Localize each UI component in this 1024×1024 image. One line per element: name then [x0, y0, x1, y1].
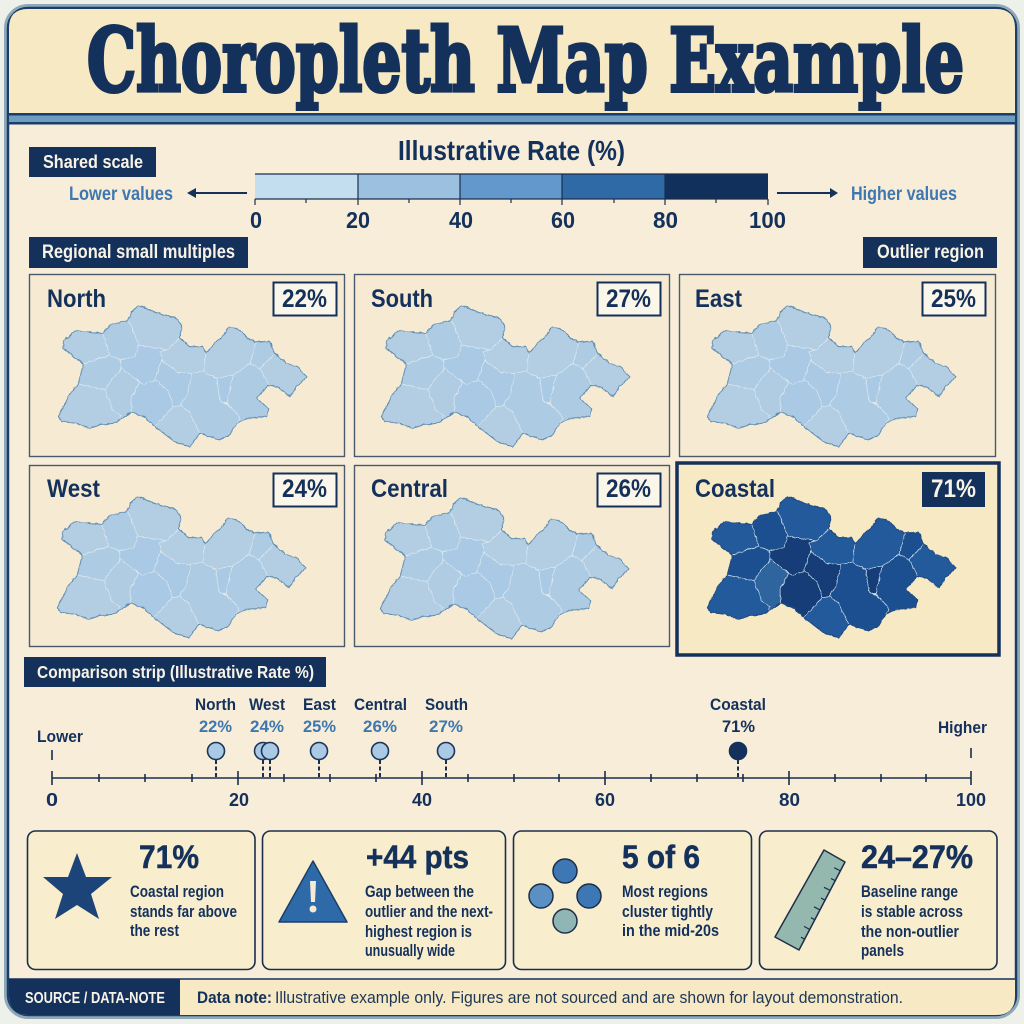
card: 24–27%: is stable across [861, 903, 963, 921]
panel: East [680, 274, 996, 456]
badge: regional small multiples [29, 237, 248, 268]
panel: South [354, 274, 670, 456]
legend ticks: 80 [653, 207, 678, 233]
marker: Central [354, 695, 407, 778]
card: 24–27%: the non-outlier [861, 923, 959, 941]
marker: Coastal: Coastal [710, 695, 766, 714]
marker: Central: 26% [363, 717, 397, 736]
marker: West: West [249, 695, 285, 714]
marker: South [425, 695, 468, 778]
comparison strip chart [37, 695, 987, 810]
marker: East [303, 695, 336, 778]
card: 5 of 6: in the mid-20s [622, 922, 719, 940]
card: 24–27%: panels [861, 942, 904, 960]
badge: shared scale: Shared scale [43, 151, 143, 172]
marker: East: East [303, 695, 336, 714]
card: 5 of 6: cluster tightly [622, 903, 714, 921]
panel: North: North [47, 285, 106, 313]
legend ticks: 100 [749, 207, 786, 233]
card: +44 pts: outlier and the next- [365, 903, 493, 921]
card: 24–27% [760, 831, 997, 970]
footer data note: Data note: [197, 988, 272, 1007]
marker: West [249, 695, 285, 778]
card: 71%: stands far above [130, 903, 237, 921]
card: +44 pts: Gap between the [365, 883, 474, 901]
strip axis labels: 80 [779, 790, 800, 810]
marker: East: 25% [303, 717, 336, 736]
panel: Central: 26% [606, 475, 651, 503]
marker: Coastal [710, 695, 766, 778]
legend ticks: 0 [250, 207, 262, 233]
marker: Coastal: 71% [722, 717, 755, 736]
marker: North: 22% [199, 717, 232, 736]
card: 5 of 6: Most regions [622, 883, 708, 901]
card: 24–27%: 24–27% [861, 839, 973, 875]
map: North [58, 305, 307, 447]
strip axis [52, 748, 971, 785]
card: 5 of 6: 5 of 6 [622, 839, 700, 875]
panel: South: South [371, 285, 433, 313]
panel: Central: Central [371, 475, 448, 503]
icon: cluster of dots [529, 859, 601, 933]
marker: West: 24% [250, 717, 284, 736]
strip axis labels: 60 [595, 790, 615, 810]
badge: comparison strip: Comparison strip (Illustrative Rate %) [37, 662, 314, 682]
strip axis labels [37, 718, 987, 810]
strip axis labels: Lower [37, 727, 83, 746]
panel: East: 25% [931, 285, 976, 313]
badge: outlier region [863, 237, 997, 268]
card: 71% [28, 831, 255, 970]
map: Coastal [707, 496, 956, 638]
higher values label and arrow: Higher values [851, 184, 957, 205]
strip axis labels: 40 [412, 790, 432, 810]
card: 71%: the rest [130, 922, 179, 940]
badge: outlier region: Outlier region [877, 242, 984, 263]
icon: warning triangle [279, 861, 347, 922]
icon: ruler [775, 850, 845, 950]
legend ticks: 20 [346, 207, 370, 233]
panel: North [30, 274, 344, 456]
panel: Coastal outlier: 71% [931, 475, 976, 503]
strip axis labels: Higher [938, 718, 987, 737]
strip axis labels: 20 [229, 790, 249, 810]
icon: star [43, 853, 112, 919]
panel: South: 27% [606, 285, 651, 313]
map: East [707, 305, 956, 447]
marker: Central: Central [354, 695, 407, 714]
card: 24–27%: Baseline range [861, 883, 958, 901]
panel: West: 24% [282, 475, 327, 503]
header band [9, 9, 1015, 124]
footer: source note [9, 979, 1015, 1015]
panel: Coastal outlier: Coastal [695, 475, 775, 503]
panel: North: 22% [282, 285, 327, 313]
panel: West [30, 466, 344, 646]
marker: South: 27% [429, 717, 463, 736]
lower values label and arrow [69, 184, 247, 205]
marker: North: North [195, 695, 236, 714]
legend: illustrative rate scale [69, 135, 957, 233]
badge: comparison strip [24, 657, 326, 687]
badge: regional small multiples: Regional small multiples [42, 242, 235, 263]
strip axis labels: 100 [956, 790, 986, 810]
card: +44 pts [262, 831, 506, 970]
footer data note: Illustrative example only. Figures are not sourced and are shown for layout demonstration. [275, 988, 903, 1007]
strip axis labels: 0 [46, 790, 58, 810]
panel: Central [354, 466, 670, 646]
map: West [57, 496, 306, 638]
marker: South: South [425, 695, 468, 714]
footer label [9, 979, 180, 1015]
panel: Coastal outlier [677, 463, 999, 655]
legend ticks [250, 207, 786, 233]
map: Central [380, 497, 629, 639]
lower values label and arrow: Lower values [69, 184, 173, 205]
legend ticks: 60 [551, 207, 575, 233]
card: +44 pts: +44 pts [366, 839, 469, 875]
marker: North [195, 695, 236, 778]
footer label: SOURCE / DATA-NOTE [25, 990, 165, 1007]
legend colour bar [255, 174, 768, 205]
card: 5 of 6 [514, 831, 752, 970]
legend ticks: 40 [449, 207, 473, 233]
card: +44 pts: unusually wide [365, 942, 455, 960]
higher values label and arrow [777, 184, 957, 205]
panel: East: East [695, 285, 743, 313]
map: South [381, 305, 630, 447]
card: 71%: 71% [139, 839, 199, 875]
legend title: Illustrative Rate (%) [398, 135, 625, 166]
panel: West: West [47, 475, 101, 503]
card: +44 pts: highest region is [365, 923, 472, 941]
card: 71%: Coastal region [130, 883, 224, 901]
badge: shared scale [29, 147, 156, 177]
